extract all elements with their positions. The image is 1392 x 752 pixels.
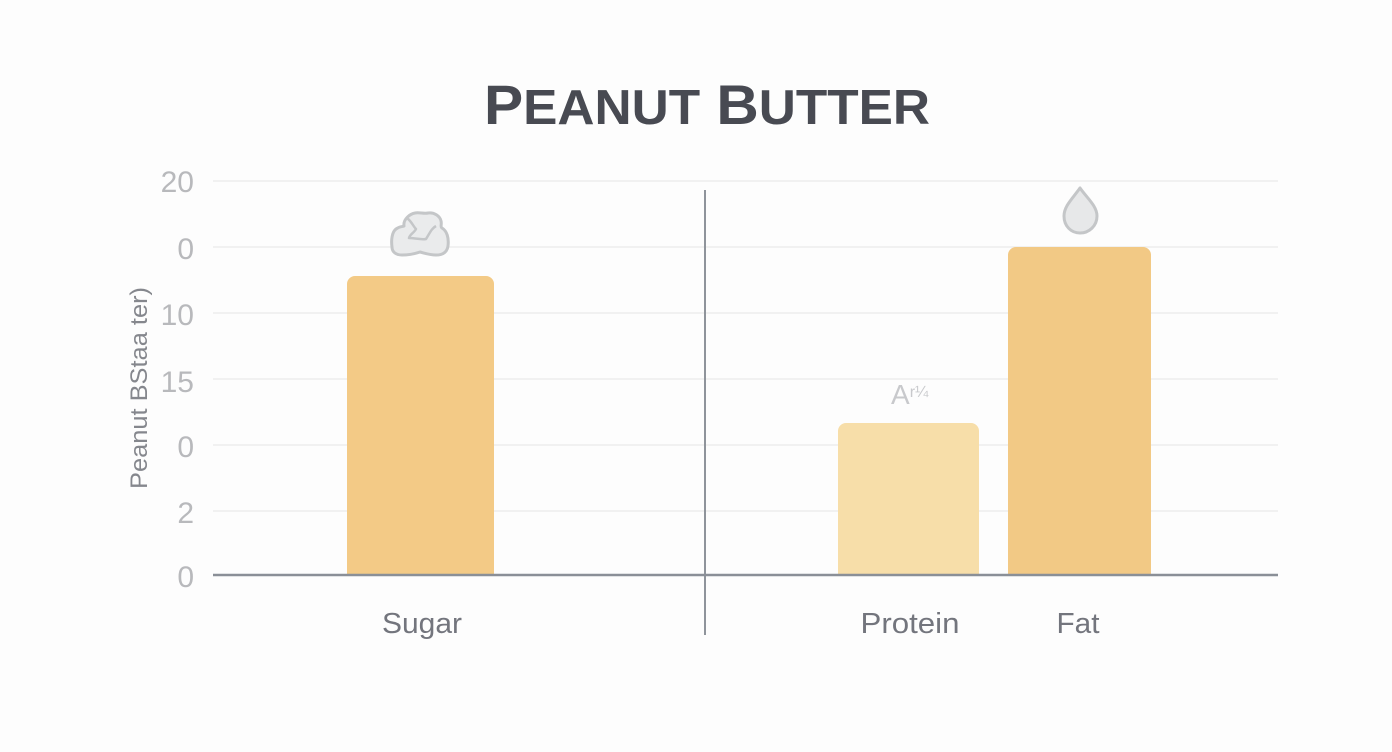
bar: protein [838,423,979,575]
y-axis tick labels: 0 [177,431,194,464]
center divider [704,190,706,635]
y-axis tick labels: 10 [161,299,194,332]
y-axis tick labels: 0 [177,561,194,594]
bar: fat [1008,247,1151,575]
y-axis tick labels: 0 [177,233,194,266]
y-axis tick labels [161,166,194,594]
category labels: Protein [860,608,960,640]
protein label glyph: A [891,379,910,410]
category labels: Fat [1056,608,1100,640]
category labels [382,608,1100,640]
bar: sugar [347,276,494,575]
protein label glyph: r¼ [910,384,929,401]
title: PEANUT BUTTER [484,73,930,136]
icon: oil drop [1064,188,1097,233]
baseline axis [213,574,1278,576]
y-axis title: Peanut BStaa ter) [126,287,153,489]
category labels: Sugar [382,608,462,640]
y-axis tick labels: 20 [161,166,194,199]
icon: sugar cube [392,213,448,255]
y-axis tick labels: 2 [177,497,194,530]
y-axis tick labels: 15 [161,366,194,399]
